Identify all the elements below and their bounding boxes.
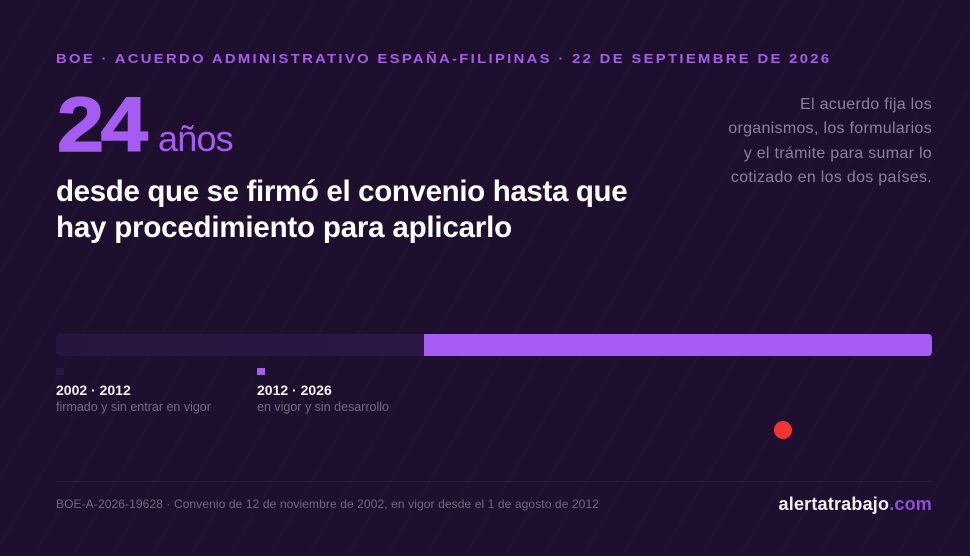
number 24: 24 [57, 82, 145, 168]
side description [728, 96, 932, 186]
brand: alertatrabajo.com: alertatrabajo.com [779, 494, 932, 514]
unit años: años [158, 118, 233, 159]
side description: El acuerdo fija los [800, 96, 932, 113]
side description: organismos, los formularios [728, 120, 932, 137]
eyebrow heading: BOE · ACUERDO ADMINISTRATIVO ESPAÑA-FILIPINAS · 22 DE SEPTIEMBRE DE 2026 [56, 51, 831, 66]
red dot marker [774, 421, 792, 439]
main headline [56, 175, 627, 244]
legend description: firmado y sin entrar en vigor [56, 400, 211, 414]
side description: y el trámite para sumar lo [744, 145, 932, 162]
source note: BOE-A-2026-19628 · Convenio de 12 de noviembre de 2002, en vigor desde el 1 de agosto de 2012 [56, 497, 599, 511]
legend period: 2002 · 2012 [56, 382, 131, 398]
timeline bar [56, 334, 932, 356]
legend swatch purple [257, 368, 265, 375]
segment 2012-2026 [424, 334, 932, 356]
big number: 24 años [57, 82, 233, 168]
legend item: 2012-2026 [257, 368, 389, 414]
side description: cotizado en los dos países. [731, 169, 932, 186]
legend period: 2012 · 2026 [257, 382, 332, 398]
legend item: 2002-2012 [56, 368, 211, 414]
legend swatch dark [56, 368, 64, 375]
legend description: en vigor y sin desarrollo [257, 400, 389, 414]
main headline: desde que se firmó el convenio hasta que [56, 175, 627, 208]
main headline: hay procedimiento para aplicarlo [56, 211, 512, 244]
